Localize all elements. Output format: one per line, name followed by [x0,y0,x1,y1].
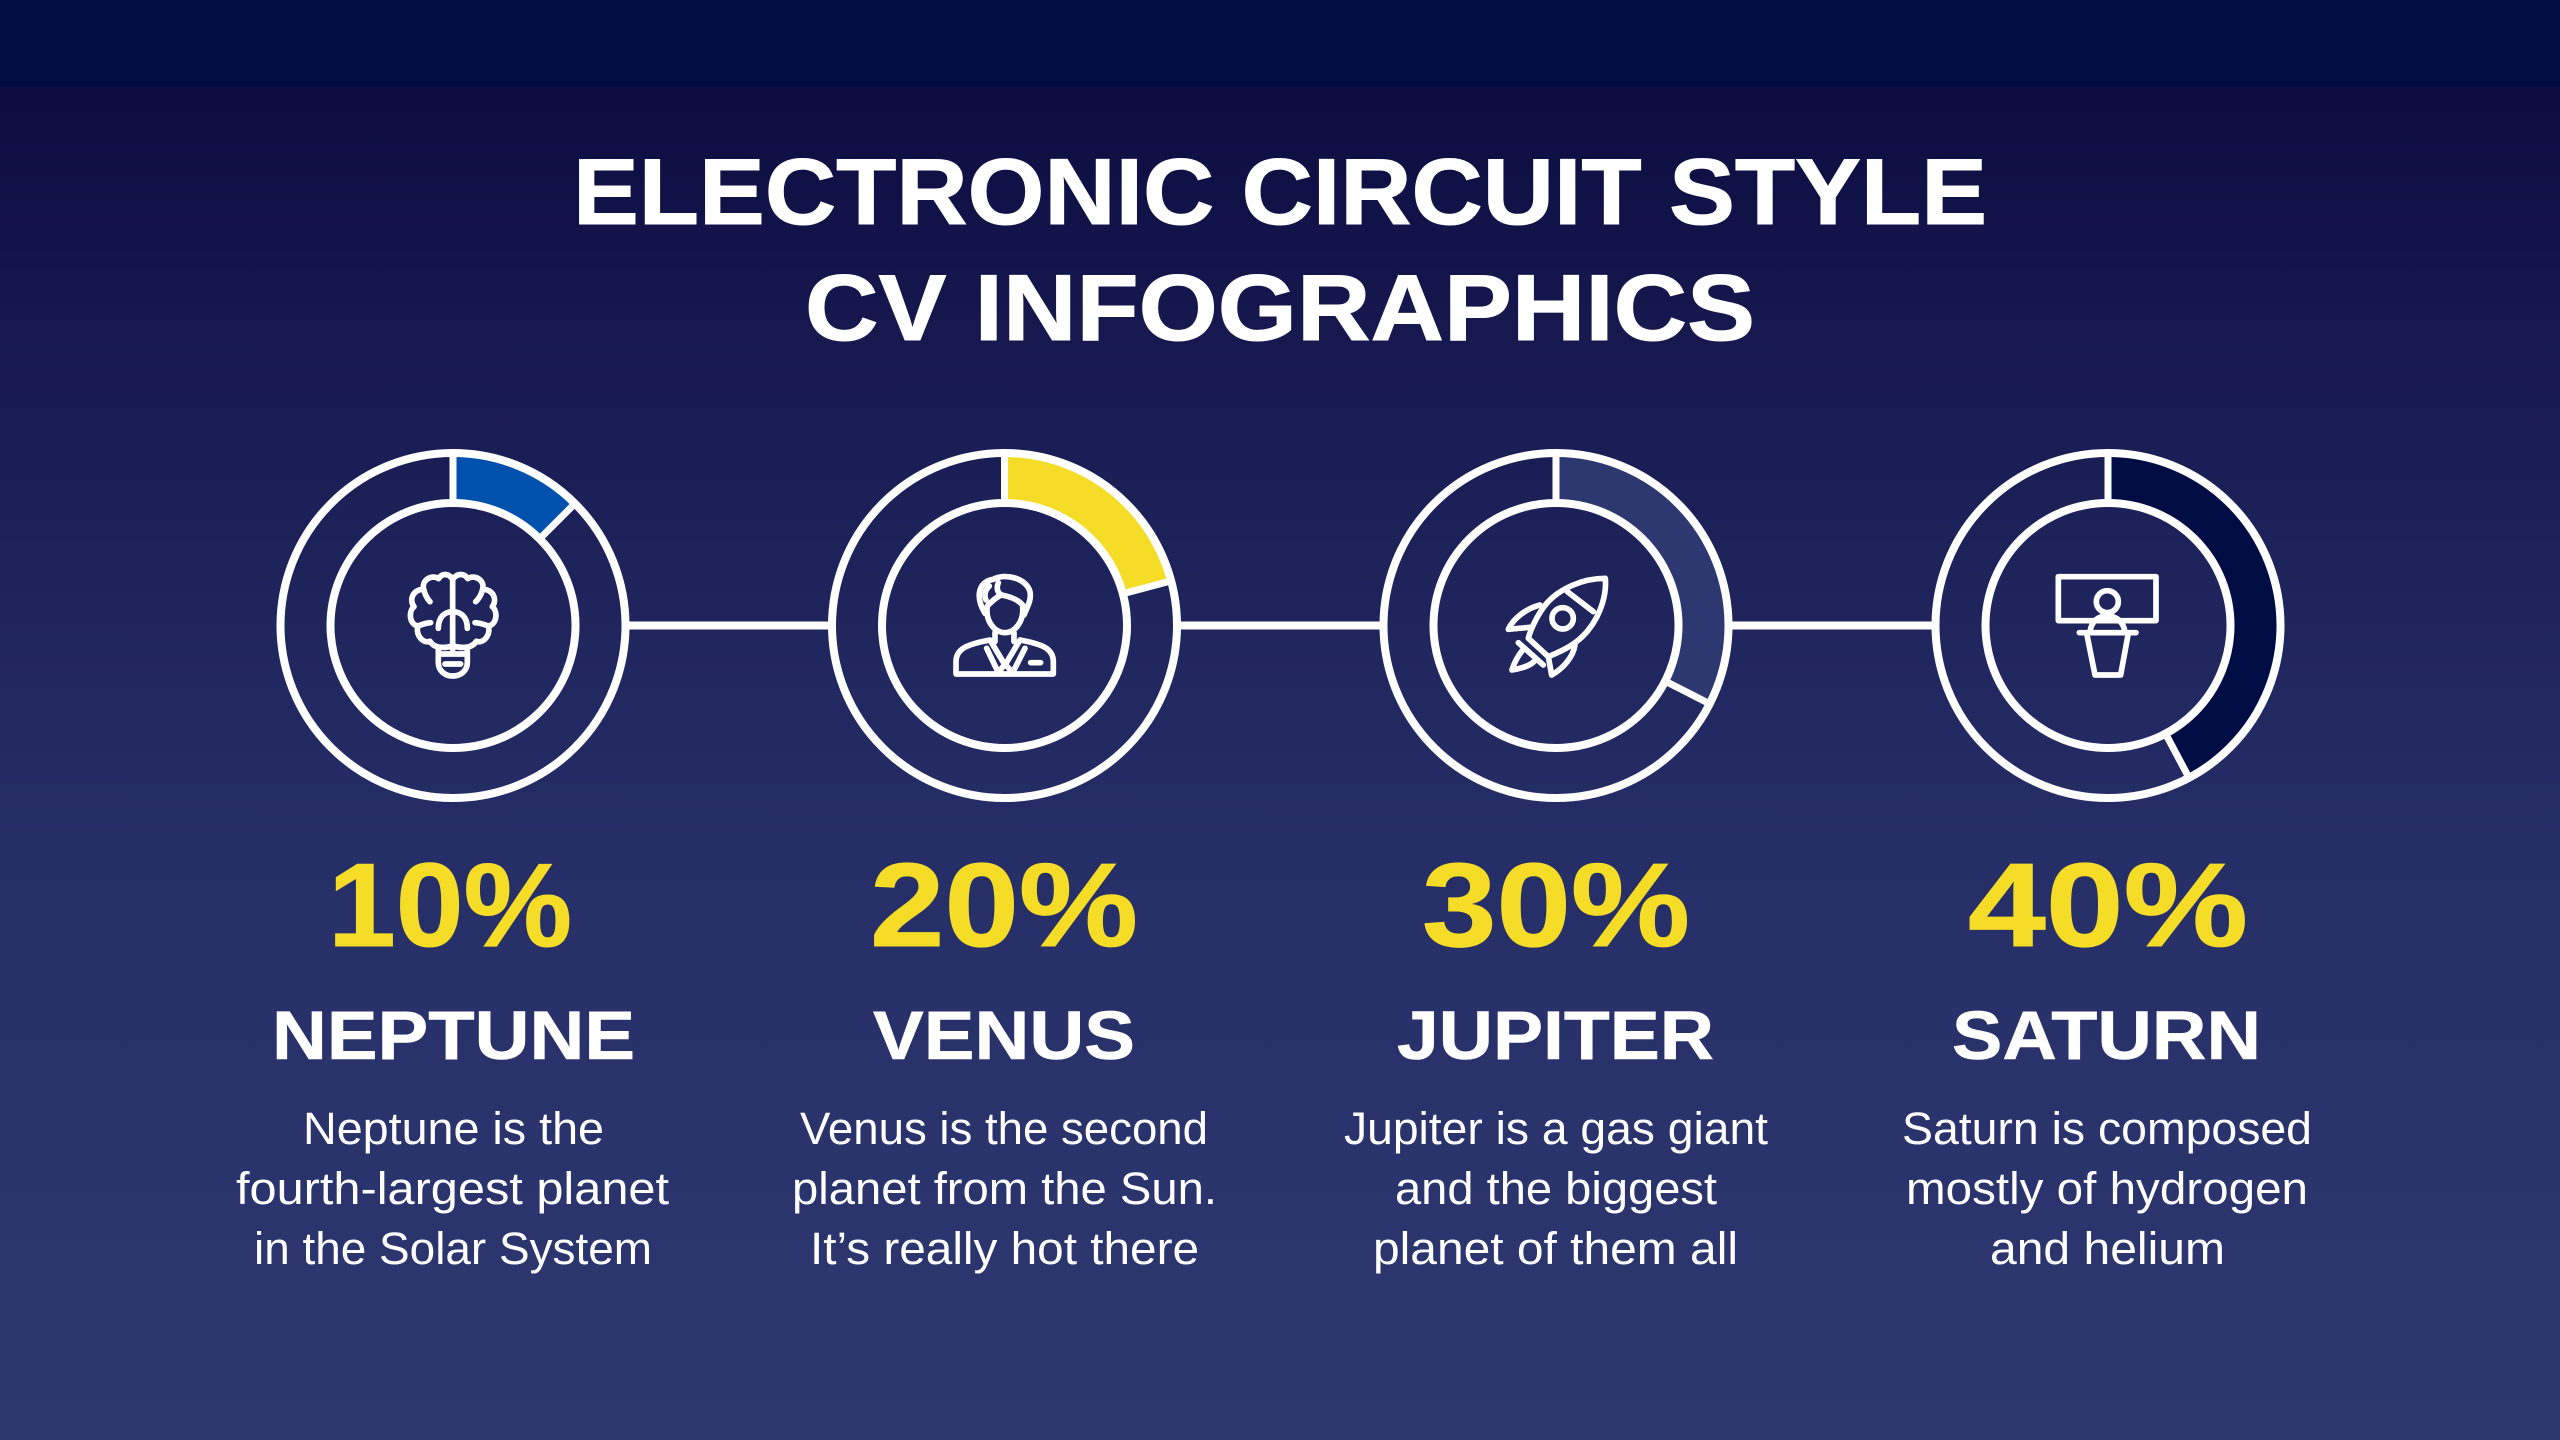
description: mostly of hydrogen [1906,1163,2308,1214]
connector: Neptune to Venus [626,622,832,630]
name: VENUS [873,997,1135,1074]
description: Jupiter is a gas giant [1344,1103,1769,1154]
donut: Jupiter 30% [1384,453,1728,798]
title: CV INFOGRAPHICS [805,255,1755,360]
description: and the biggest [1395,1163,1718,1214]
description [236,1103,670,1274]
description: and helium [1990,1223,2225,1274]
donut: Venus 20% [832,453,1177,798]
description: planet of them all [1373,1223,1738,1274]
description [792,1103,1217,1274]
connector: Jupiter to Saturn [1730,622,1934,630]
name: JUPITER [1397,997,1714,1074]
icon: businessman [956,577,1053,674]
description [1902,1103,2312,1274]
description: planet from the Sun. [792,1163,1217,1214]
percentage: 10% [328,839,572,972]
icon: rocket [1508,578,1606,675]
panel: Neptune [236,453,670,1274]
percentage: 40% [1968,839,2248,972]
name: SATURN [1952,997,2261,1074]
percentage: 20% [870,839,1138,972]
icon: brain light bulb [410,574,496,676]
description: Venus is the second [800,1103,1208,1154]
description [1344,1103,1769,1274]
description: Neptune is the [303,1103,604,1154]
description: Saturn is composed [1902,1103,2312,1154]
description: fourth-largest planet [236,1163,670,1214]
name: NEPTUNE [272,997,635,1074]
panel: Jupiter [1344,453,1769,1274]
panel: Saturn [1902,453,2312,1274]
panel: Venus [792,453,1217,1274]
percentage: 30% [1422,839,1690,972]
description: It’s really hot there [810,1223,1199,1274]
description: in the Solar System [254,1223,652,1274]
donut: Saturn 40% [1936,453,2280,798]
donut: Neptune 10% [280,453,626,798]
icon: speaker at podium [2058,577,2156,675]
connector: Venus to Jupiter [1178,622,1384,630]
title: ELECTRONIC CIRCUIT STYLE [573,139,1987,244]
title [573,139,1987,360]
